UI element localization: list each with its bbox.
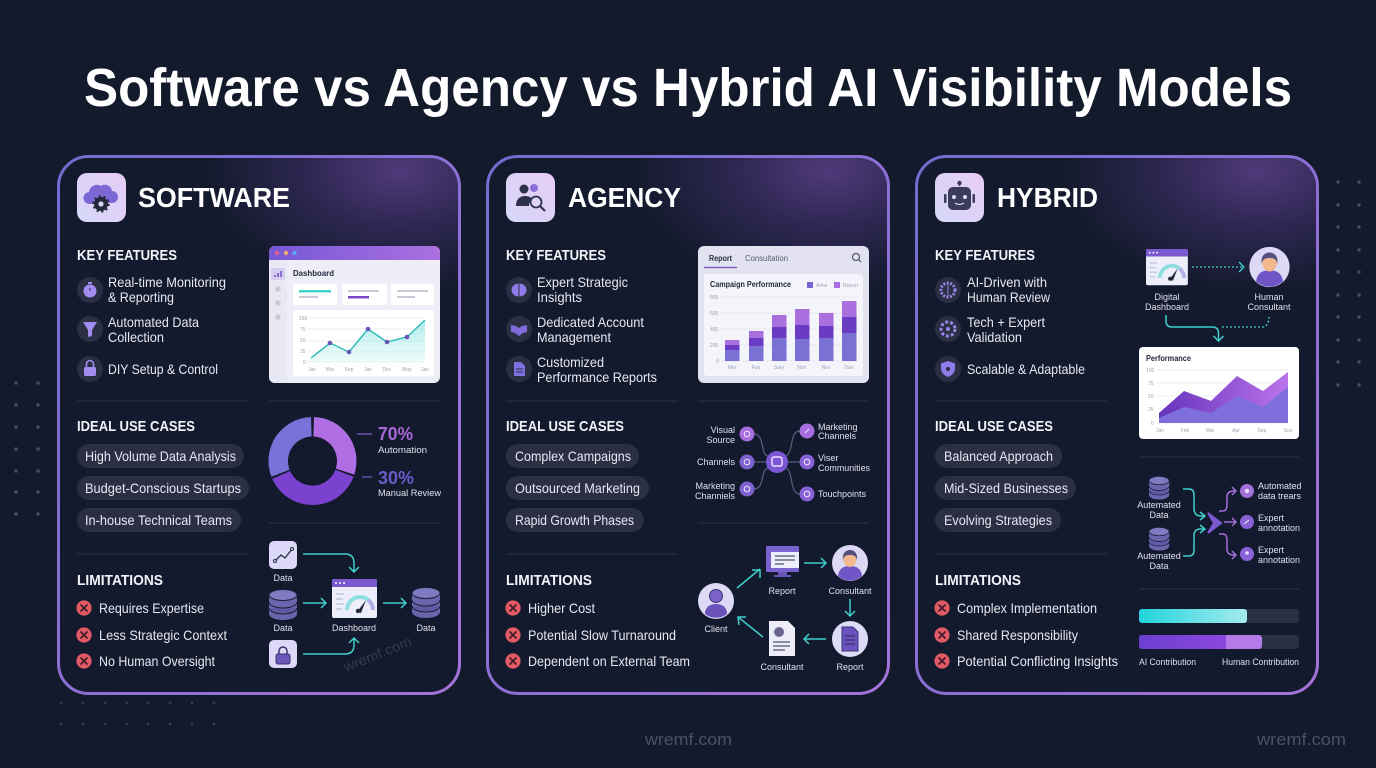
donut chart [268, 417, 356, 505]
heading: hybrid: HYBRID [997, 182, 1098, 213]
stacked bar chart: campaign performance: Report [709, 254, 732, 263]
dashboard mockup: Mar [326, 367, 335, 373]
heading: software: SOFTWARE [138, 182, 290, 213]
stacked bar chart: campaign performance: 0 [716, 359, 719, 365]
feature: strategic insights [506, 274, 628, 305]
heading: limitations: LIMITATIONS [506, 572, 592, 589]
donut legend: Automation [378, 445, 427, 455]
panel: hybrid [916, 156, 1318, 694]
heading: ideal use cases: IDEAL USE CASES [77, 418, 195, 435]
flow diagram: data to dashboard: Data [273, 573, 293, 583]
icon: cloud gear [77, 173, 126, 222]
network diagram: Visual [711, 425, 735, 435]
stacked bar chart: campaign performance: Nov [822, 365, 831, 371]
area chart: performance: Apr [1232, 428, 1240, 434]
limitation: complex implementation: Complex Implementation [957, 600, 1097, 616]
footer watermark center: wremf.com [644, 731, 732, 749]
network diagram: Source [706, 435, 735, 445]
feature: automated data collection: Automated Data [108, 314, 199, 330]
flow: digital dashboard to human consultant: Consultant [1247, 302, 1291, 312]
area chart: performance: Feb [1181, 428, 1190, 434]
dashboard mockup: 75 [300, 327, 306, 333]
pill: balanced approach [935, 444, 1062, 468]
stacked bar chart: campaign performance: Non [797, 365, 807, 371]
feature: automated data collection: Collection [108, 329, 164, 345]
feature: strategic insights: Expert Strategic [537, 274, 628, 290]
stacked bar chart: campaign performance: Dan [844, 365, 854, 371]
heading: key features: KEY FEATURES [935, 247, 1035, 264]
feature: real-time monitoring: & Reporting [108, 289, 174, 305]
watermark: wremf.com [340, 633, 414, 675]
area chart: performance: 0 [1151, 421, 1154, 427]
flow: automated data to annotation: Expert [1258, 545, 1285, 555]
pill: outsourced marketing: Outsourced Marketing [515, 480, 640, 496]
limitation: cost [505, 600, 595, 616]
pill: in-house [77, 508, 241, 532]
stacked bar chart: campaign performance: Repun [843, 283, 858, 289]
flow diagram: client and consultant cycle [698, 545, 872, 672]
pill: complex campaigns: Complex Campaigns [515, 448, 631, 464]
dashboard mockup: Jan [421, 367, 429, 373]
heading: ideal use cases: IDEAL USE CASES [935, 418, 1053, 435]
area chart: performance: Sep [1258, 428, 1267, 434]
feature: performance reports: Performance Reports [537, 369, 657, 385]
flow: automated data to annotation [1137, 476, 1302, 571]
limitation: expertise: Requires Expertise [99, 600, 204, 616]
stacked bar chart: campaign performance: 600 [710, 311, 719, 317]
flow: automated data to annotation: Data [1149, 510, 1169, 520]
feature: account management [506, 314, 644, 345]
stacked bar chart: campaign performance: Mar [728, 365, 737, 371]
stacked bar chart: campaign performance: Campaign Performance [710, 280, 791, 289]
pill: high volume: High Volume Data Analysis [85, 448, 236, 464]
contribution bars [1139, 609, 1299, 667]
dashboard mockup: 25 [300, 349, 306, 355]
footer watermark right: wremf.com [1256, 731, 1346, 749]
limitation: turnaround: Potential Slow Turnaround [528, 627, 676, 643]
stacked bar chart: campaign performance [698, 246, 869, 383]
feature: strategic insights: Insights [537, 289, 582, 305]
limitation: shared responsibility: Shared Responsibility [957, 627, 1078, 643]
limitation: cost: Higher Cost [528, 600, 595, 616]
pill: rapid growth [506, 508, 644, 532]
flow: automated data to annotation: Automated [1258, 481, 1302, 491]
donut legend [357, 424, 442, 498]
panel: agency [488, 156, 888, 694]
pill: outsourced marketing [506, 476, 649, 500]
flow: digital dashboard to human consultant: Human [1254, 292, 1284, 302]
limitation: context: Less Strategic Context [99, 627, 227, 643]
flow diagram: client and consultant cycle: Client [704, 624, 728, 634]
network diagram: Touchpoints [818, 489, 867, 499]
flow diagram: data to dashboard: Data [273, 623, 293, 633]
pill: budget-conscious: Budget-Conscious Startups [85, 480, 241, 496]
pill: mid-sized businesses [935, 476, 1076, 500]
feature: real-time monitoring: Real-time Monitoring [108, 274, 226, 290]
area chart: performance: 75 [1148, 381, 1154, 387]
heading: limitations: LIMITATIONS [935, 572, 1021, 589]
dashboard mockup: Jan [364, 367, 372, 373]
feature: automated data collection [77, 314, 199, 345]
flow diagram: data to dashboard: Data [416, 623, 436, 633]
dashboard mockup: 165 [299, 316, 308, 322]
feature: account management: Dedicated Account [537, 314, 644, 330]
area chart: performance [1139, 347, 1299, 439]
dashboard mockup: 0 [303, 360, 306, 366]
flow: automated data to annotation: data trears [1258, 491, 1302, 501]
flow diagram: client and consultant cycle: Consultant [760, 662, 804, 672]
network diagram: Viser [818, 453, 838, 463]
feature: ai-driven [935, 274, 1051, 305]
stacked bar chart: campaign performance: Sary [774, 365, 785, 371]
heading: ideal use cases: IDEAL USE CASES [506, 418, 624, 435]
pill: in-house: In-house Technical Teams [85, 512, 232, 528]
feature: real-time monitoring [77, 274, 226, 305]
pill: evolving strategies [935, 508, 1061, 532]
limitation: oversight: No Human Oversight [99, 653, 215, 669]
area chart: performance: Mar [1206, 428, 1215, 434]
feature: scalable [935, 356, 1085, 382]
feature: diy setup [77, 356, 218, 382]
pill: budget-conscious [77, 476, 249, 500]
flow diagram: data to dashboard [269, 541, 440, 668]
donut legend: 70% [378, 424, 413, 444]
flow: automated data to annotation: Expert [1258, 513, 1285, 523]
panel: software [58, 156, 460, 694]
stacked bar chart: campaign performance: Consultation [745, 254, 788, 263]
dashboard mockup: Dashboard [293, 268, 334, 278]
flow: automated data to annotation: annotation [1258, 555, 1300, 565]
feature: tech and expert: Validation [967, 329, 1022, 345]
area chart: performance: Sun [1284, 428, 1293, 434]
feature: tech and expert: Tech + Expert [967, 314, 1045, 330]
dashboard mockup: Dec [383, 367, 392, 373]
pill: rapid growth: Rapid Growth Phases [515, 512, 634, 528]
network diagram: Channels [697, 457, 735, 467]
heading: key features: KEY FEATURES [506, 247, 606, 264]
dashboard mockup: Sep [345, 367, 354, 373]
heading: agency: AGENCY [568, 182, 681, 213]
contribution bars: AI Contribution [1139, 657, 1196, 667]
icon: robot [935, 173, 984, 222]
flow diagram: client and consultant cycle: Consultant [828, 586, 872, 596]
pill: mid-sized businesses: Mid-Sized Businesses [944, 480, 1068, 496]
pill: evolving strategies: Evolving Strategies [944, 512, 1052, 528]
dashboard mockup: Jan [308, 367, 316, 373]
pill: high volume [77, 444, 244, 468]
feature: ai-driven: AI-Driven with [967, 274, 1047, 290]
area chart: performance: 25 [1148, 407, 1154, 413]
flow diagram: data to dashboard: Dashboard [332, 623, 376, 633]
flow: automated data to annotation: Data [1149, 561, 1169, 571]
stacked bar chart: campaign performance: Aime [816, 283, 828, 289]
flow: digital dashboard to human consultant: Dashboard [1145, 302, 1189, 312]
stacked bar chart: campaign performance: Fun [752, 365, 761, 371]
network diagram: Communities [818, 463, 870, 473]
donut legend: Manual Review [378, 488, 442, 498]
feature: ai-driven: Human Review [967, 289, 1051, 305]
network diagram [695, 422, 870, 502]
heading: key features: KEY FEATURES [77, 247, 177, 264]
feature: diy setup: DIY Setup & Control [108, 361, 218, 377]
feature: account management: Management [537, 329, 611, 345]
flow: automated data to annotation: Autemated [1137, 500, 1181, 510]
feature: scalable: Scalable & Adaptable [967, 361, 1085, 377]
network diagram: Marketing [695, 481, 735, 491]
flow: automated data to annotation: annotation [1258, 523, 1300, 533]
area chart: performance: 50 [1148, 394, 1154, 400]
area chart: performance: Performance [1146, 354, 1191, 363]
limitation: external team: Dependent on External Team [528, 653, 690, 669]
pill: complex campaigns [506, 444, 639, 468]
network diagram: Channiels [695, 491, 735, 501]
heading: limitations: LIMITATIONS [77, 572, 163, 589]
feature: tech and expert [935, 314, 1045, 345]
dashboard mockup: 50 [300, 338, 306, 344]
network diagram: Marketing [818, 422, 858, 432]
feature: performance reports [506, 354, 657, 385]
flow diagram: client and consultant cycle: Report [768, 586, 796, 596]
flow: digital dashboard to human consultant: Digital [1154, 292, 1180, 302]
flow diagram: client and consultant cycle: Report [836, 662, 864, 672]
pill: balanced approach: Balanced Approach [944, 448, 1053, 464]
contribution bars: Human Contribution [1222, 657, 1299, 667]
flow: digital dashboard to human consultant [1145, 247, 1291, 341]
area chart: performance: Jan [1156, 428, 1164, 434]
network diagram: Channels [818, 431, 857, 441]
feature: performance reports: Customized [537, 354, 604, 370]
dashboard mockup [269, 246, 440, 383]
dashboard mockup: May [402, 367, 412, 373]
area chart: performance: 100 [1146, 368, 1155, 374]
stacked bar chart: campaign performance: 800 [710, 295, 719, 301]
donut legend: 30% [378, 468, 414, 488]
title: Software vs Agency vs Hybrid AI Visibility Models [84, 58, 1292, 118]
limitation: conflicting insights: Potential Conflicting Insights [957, 653, 1118, 669]
flow: automated data to annotation: Autemated [1137, 551, 1181, 561]
icon: people search [506, 173, 555, 222]
stacked bar chart: campaign performance: 400 [710, 327, 719, 333]
stacked bar chart: campaign performance: 200 [710, 343, 719, 349]
